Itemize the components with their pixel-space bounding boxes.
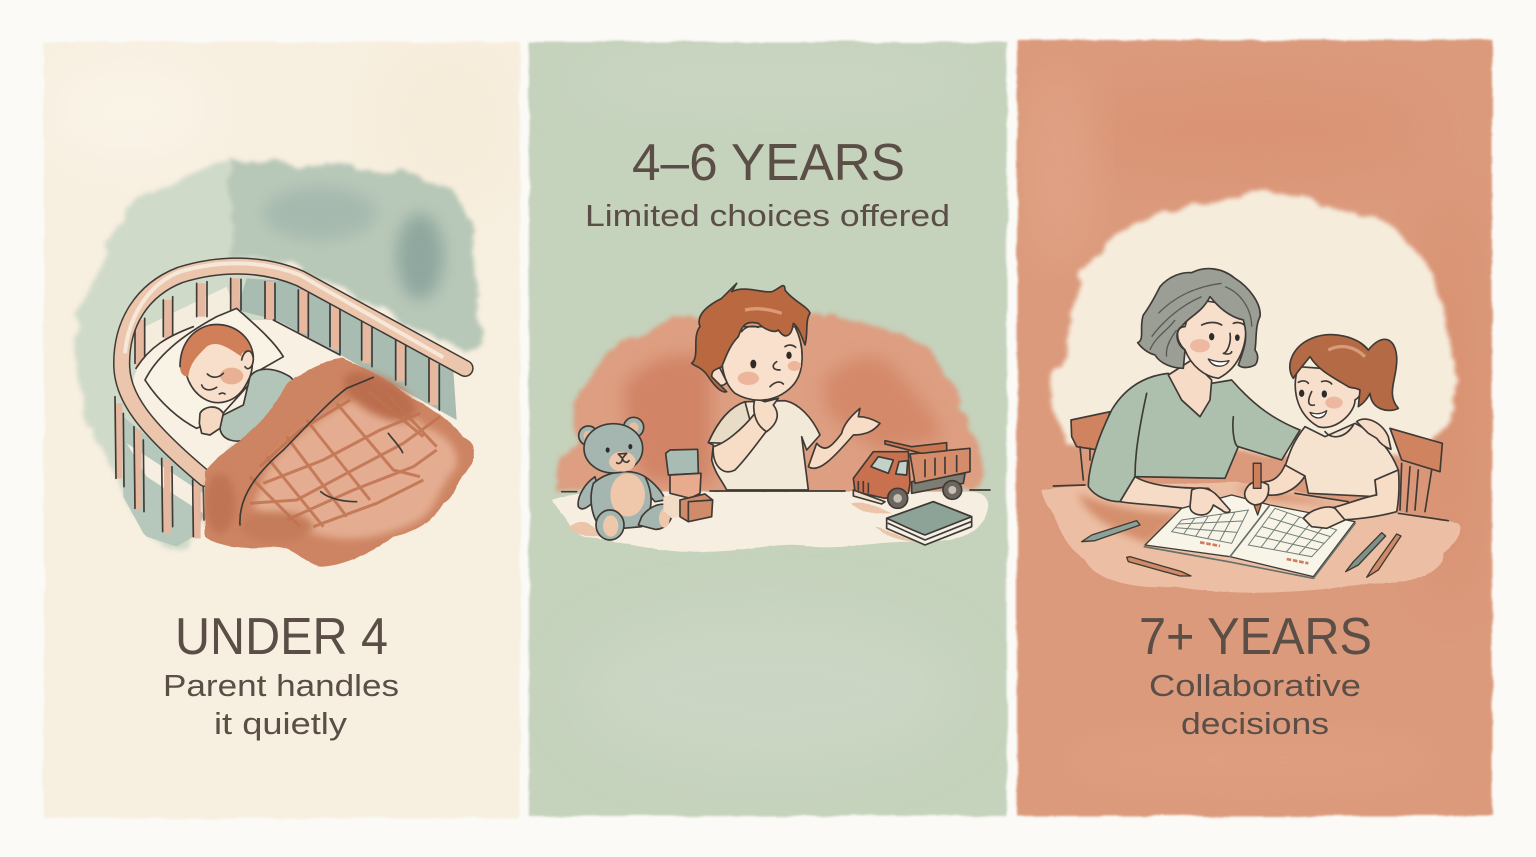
description: parent handles it quietly: Parent handles [163, 668, 399, 703]
description: parent handles it quietly: it quietly [214, 706, 348, 741]
description: collaborative decisions: decisions [1181, 706, 1329, 741]
boy [692, 283, 880, 490]
mattress [133, 320, 347, 470]
adult torso [1088, 360, 1300, 510]
description: parent handles it quietly [163, 668, 399, 741]
pillow [145, 308, 283, 428]
panel: 7+ years [1017, 40, 1492, 816]
wooden blocks [663, 449, 713, 522]
child [1265, 335, 1399, 520]
heading: under 4: UNDER 4 [175, 608, 388, 666]
panel: under 4 [40, 40, 520, 818]
adult hand on shoulder [1357, 419, 1391, 449]
description: collaborative decisions: Collaborative [1149, 668, 1361, 703]
top rail [122, 263, 465, 478]
illustration: sleeping baby in crib [75, 158, 482, 567]
hands and pencil [1190, 463, 1345, 528]
table top [552, 492, 988, 552]
description: collaborative decisions [1149, 668, 1361, 741]
table edge [1053, 485, 1448, 521]
baby body [220, 369, 293, 441]
blanket [205, 358, 474, 567]
dump truck [853, 441, 970, 508]
workbook [1144, 495, 1355, 578]
baby hands [199, 407, 223, 435]
baby head [180, 325, 253, 403]
table shadows [568, 503, 928, 542]
table shadow [1078, 487, 1348, 543]
wall wash [75, 162, 293, 550]
far slats backing [237, 278, 457, 420]
description: limited choices offered: Limited choices offered [585, 198, 950, 233]
table edge [562, 490, 990, 492]
front lower slats [115, 397, 204, 547]
chairs [1071, 412, 1442, 512]
adult head and hair [1138, 269, 1260, 378]
back slats [135, 278, 439, 410]
heading: 4-6 years: 4–6 YEARS [632, 134, 905, 192]
illustration: boy deciding among toys [552, 283, 990, 552]
terracotta wash [556, 313, 982, 500]
heading: 7+ years: 7+ YEARS [1139, 608, 1372, 666]
book [887, 502, 972, 545]
window wash [229, 158, 482, 350]
illustration: adult and child working on a book [1042, 190, 1460, 593]
table wash [1042, 482, 1460, 593]
teddy bear [578, 417, 672, 540]
panel: 4-6 years [529, 42, 1007, 816]
pencils [1082, 521, 1401, 577]
cream wash [1050, 190, 1455, 457]
